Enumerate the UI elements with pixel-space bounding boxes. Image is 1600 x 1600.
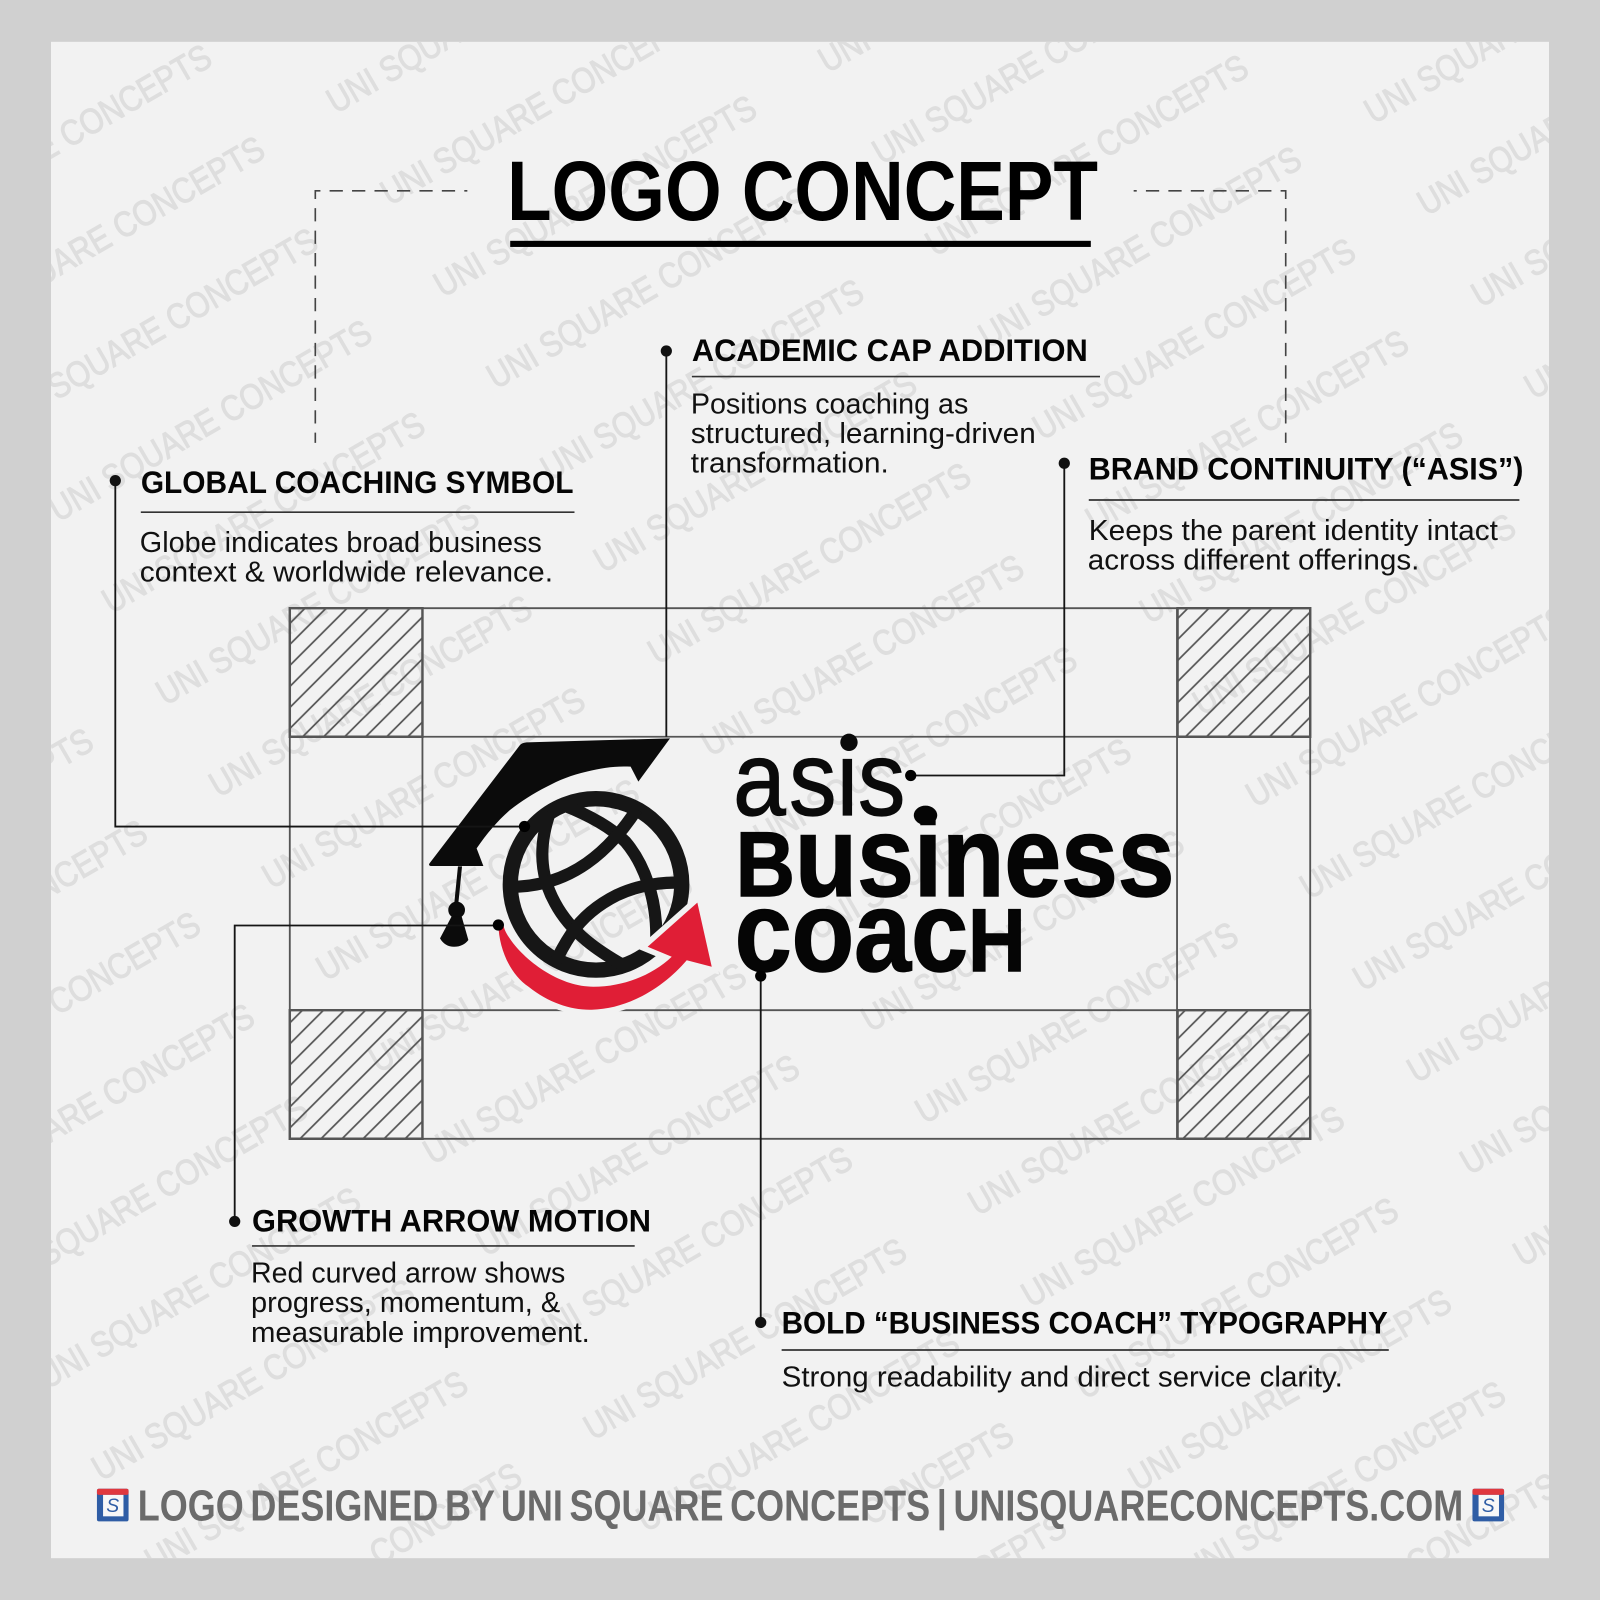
icon: footer badge right: S — [1482, 1495, 1495, 1517]
icon: footer badge left: S — [106, 1495, 119, 1517]
text: UNI SQUARE CONCEPTS — [1026, 230, 1362, 448]
text: UNI SQUARE CONCEPTS — [962, 1006, 1298, 1223]
text: UNI SQUARE CONCEPTS — [908, 914, 1245, 1131]
callout: global coaching symbol — [110, 464, 574, 832]
text: CONCEPTS — [854, 1414, 1020, 1533]
text: UNI SQUARE CONCEPTS — [1079, 322, 1415, 540]
wordmark: business i dot — [914, 806, 937, 825]
text: UNI SQUARE CONCEPTS — [310, 771, 646, 989]
callout: bold business coach typography — [755, 970, 1389, 1394]
description: structured, learning-driven — [691, 418, 1036, 450]
target dot on asis — [905, 770, 916, 781]
text: UNI SQUARE CONCEPTS — [1069, 1190, 1405, 1407]
text: UNI SQUARE CONCEPTS — [1122, 1281, 1458, 1499]
text: UNI SQUARE CONCEPTS — [972, 139, 1308, 356]
icon: graduation cap — [429, 738, 670, 947]
heading: BOLD “BUSINESS COACH” TYPOGRAPHY — [782, 1305, 1388, 1341]
icon: footer badge left — [97, 1489, 129, 1521]
wordmark: coach: coacH — [735, 869, 1026, 996]
heading rule — [252, 1245, 635, 1247]
text: UNI SQUARE CONCEPTS — [534, 271, 870, 489]
leader line: globe — [115, 481, 524, 827]
text: UNI SQUARE CONCEPTS — [31, 1179, 367, 1397]
leader line: asis — [911, 463, 1064, 776]
wordmark: asis: asis — [733, 720, 905, 838]
description: Keeps the parent identity intact — [1089, 515, 1498, 547]
text: UNI SQUARE CONCEPTS — [854, 822, 1191, 1040]
text: UNI SQUARE CONCEPTS — [1176, 1373, 1512, 1591]
text: UNI SQUARE CONCEPTS — [801, 730, 1138, 948]
heading rule — [1089, 499, 1519, 501]
heading: ACADEMIC CAP ADDITION — [692, 332, 1088, 368]
icon: footer badge right — [1472, 1489, 1504, 1521]
target dot on arrow — [493, 919, 504, 931]
heading rule — [141, 511, 574, 513]
text: UNI SQUARE CONCEPTS — [919, 47, 1255, 264]
description: measurable improvement. — [251, 1317, 590, 1349]
text: CONCEPTS — [1399, 1465, 1565, 1584]
text: UNI SQUARE CONCEPTS — [417, 955, 753, 1172]
description — [691, 388, 1036, 479]
text: CONCEPTS — [363, 1455, 528, 1574]
description: progress, momentum, & — [251, 1287, 560, 1319]
marker dot — [229, 1216, 240, 1227]
text: UNI SQUARE CONCEPTS — [1186, 506, 1522, 723]
title: LOGO CONCEPT — [507, 143, 1098, 238]
text: UNI SQUARE CONCEPTS — [523, 1139, 859, 1356]
text: UNI SQUARE CONCEPTS — [95, 404, 432, 621]
text: UNI SQUARE CONCEPTS — [85, 1271, 421, 1489]
description: Globe indicates broad business — [140, 527, 542, 559]
description: Positions coaching as — [691, 388, 968, 420]
text: UNI SQUARE CONCEPTS — [694, 547, 1031, 764]
text: UNI SQUARE CONCEPTS — [747, 639, 1084, 856]
wordmark: round i dot — [840, 734, 858, 751]
text: UNI SQUARE CONCEPTS — [1133, 414, 1469, 631]
text: UNI SQUARE CONCEPTS — [470, 1047, 806, 1264]
leader line: arrow — [235, 926, 498, 1221]
text: UNI SQUARE CONCEPTS — [630, 1322, 966, 1540]
text: UNI SQUARE CONCEPTS — [1015, 1098, 1351, 1315]
heading rule — [692, 376, 1100, 378]
text: UNI SQUARE CONCEPTS — [577, 1230, 913, 1448]
text: UNI SQUARE CONCEPTS — [149, 496, 486, 713]
target dot on coach — [755, 970, 766, 982]
title bracket dashed lines — [315, 191, 1286, 443]
callout: brand continuity — [905, 451, 1523, 781]
description: transformation. — [691, 447, 889, 479]
text: CEPTS — [966, 1506, 1073, 1591]
heading: BRAND CONTINUITY (“ASIS”) — [1089, 451, 1523, 487]
description: across different offerings. — [1088, 544, 1419, 576]
description — [1088, 515, 1498, 576]
callout: growth arrow motion — [229, 919, 651, 1349]
text: UNI SQUARE CONCEPTS — [641, 455, 978, 672]
text: UNI SQUARE CONCEPTS — [427, 88, 763, 305]
heading: GLOBAL COACHING SYMBOL — [141, 464, 573, 500]
logo: asis business coach — [429, 720, 1174, 1010]
icon: red growth arrow — [498, 903, 712, 1010]
description: Red curved arrow shows — [251, 1258, 565, 1290]
text: UNI SQUARE CONCEPTS — [42, 312, 379, 529]
text: UNI SQUARE CONCEPTS — [587, 363, 923, 580]
description — [140, 527, 553, 589]
text: UNI SQUARE CONCEPTS — [363, 863, 699, 1080]
leader line: typography — [760, 977, 762, 1322]
description: Strong readability and direct service clarity. — [782, 1362, 1343, 1394]
marker dot — [1059, 458, 1070, 469]
marker dot — [110, 475, 121, 486]
heading rule — [782, 1349, 1389, 1351]
icon: globe — [506, 799, 684, 970]
target dot on globe — [519, 821, 530, 832]
title underline — [510, 241, 1091, 247]
description: context & worldwide relevance. — [140, 557, 553, 589]
text: UNI SQUARE CONCEPTS — [480, 179, 816, 397]
marker dot — [661, 345, 672, 357]
marker dot — [755, 1317, 766, 1328]
heading: GROWTH ARROW MOTION — [252, 1203, 651, 1239]
description — [251, 1258, 590, 1349]
text: UNI SQUARE CONCEPTS — [202, 588, 539, 805]
leader line: cap — [665, 351, 667, 737]
callout: academic cap addition — [661, 332, 1100, 737]
wordmark: business: Business — [736, 794, 1174, 921]
clear space construction grid — [290, 608, 1310, 1139]
text: UNI SQUARE CONCEPTS — [255, 679, 592, 897]
text: UNI SQUARE CONCEPTS — [138, 1363, 474, 1580]
